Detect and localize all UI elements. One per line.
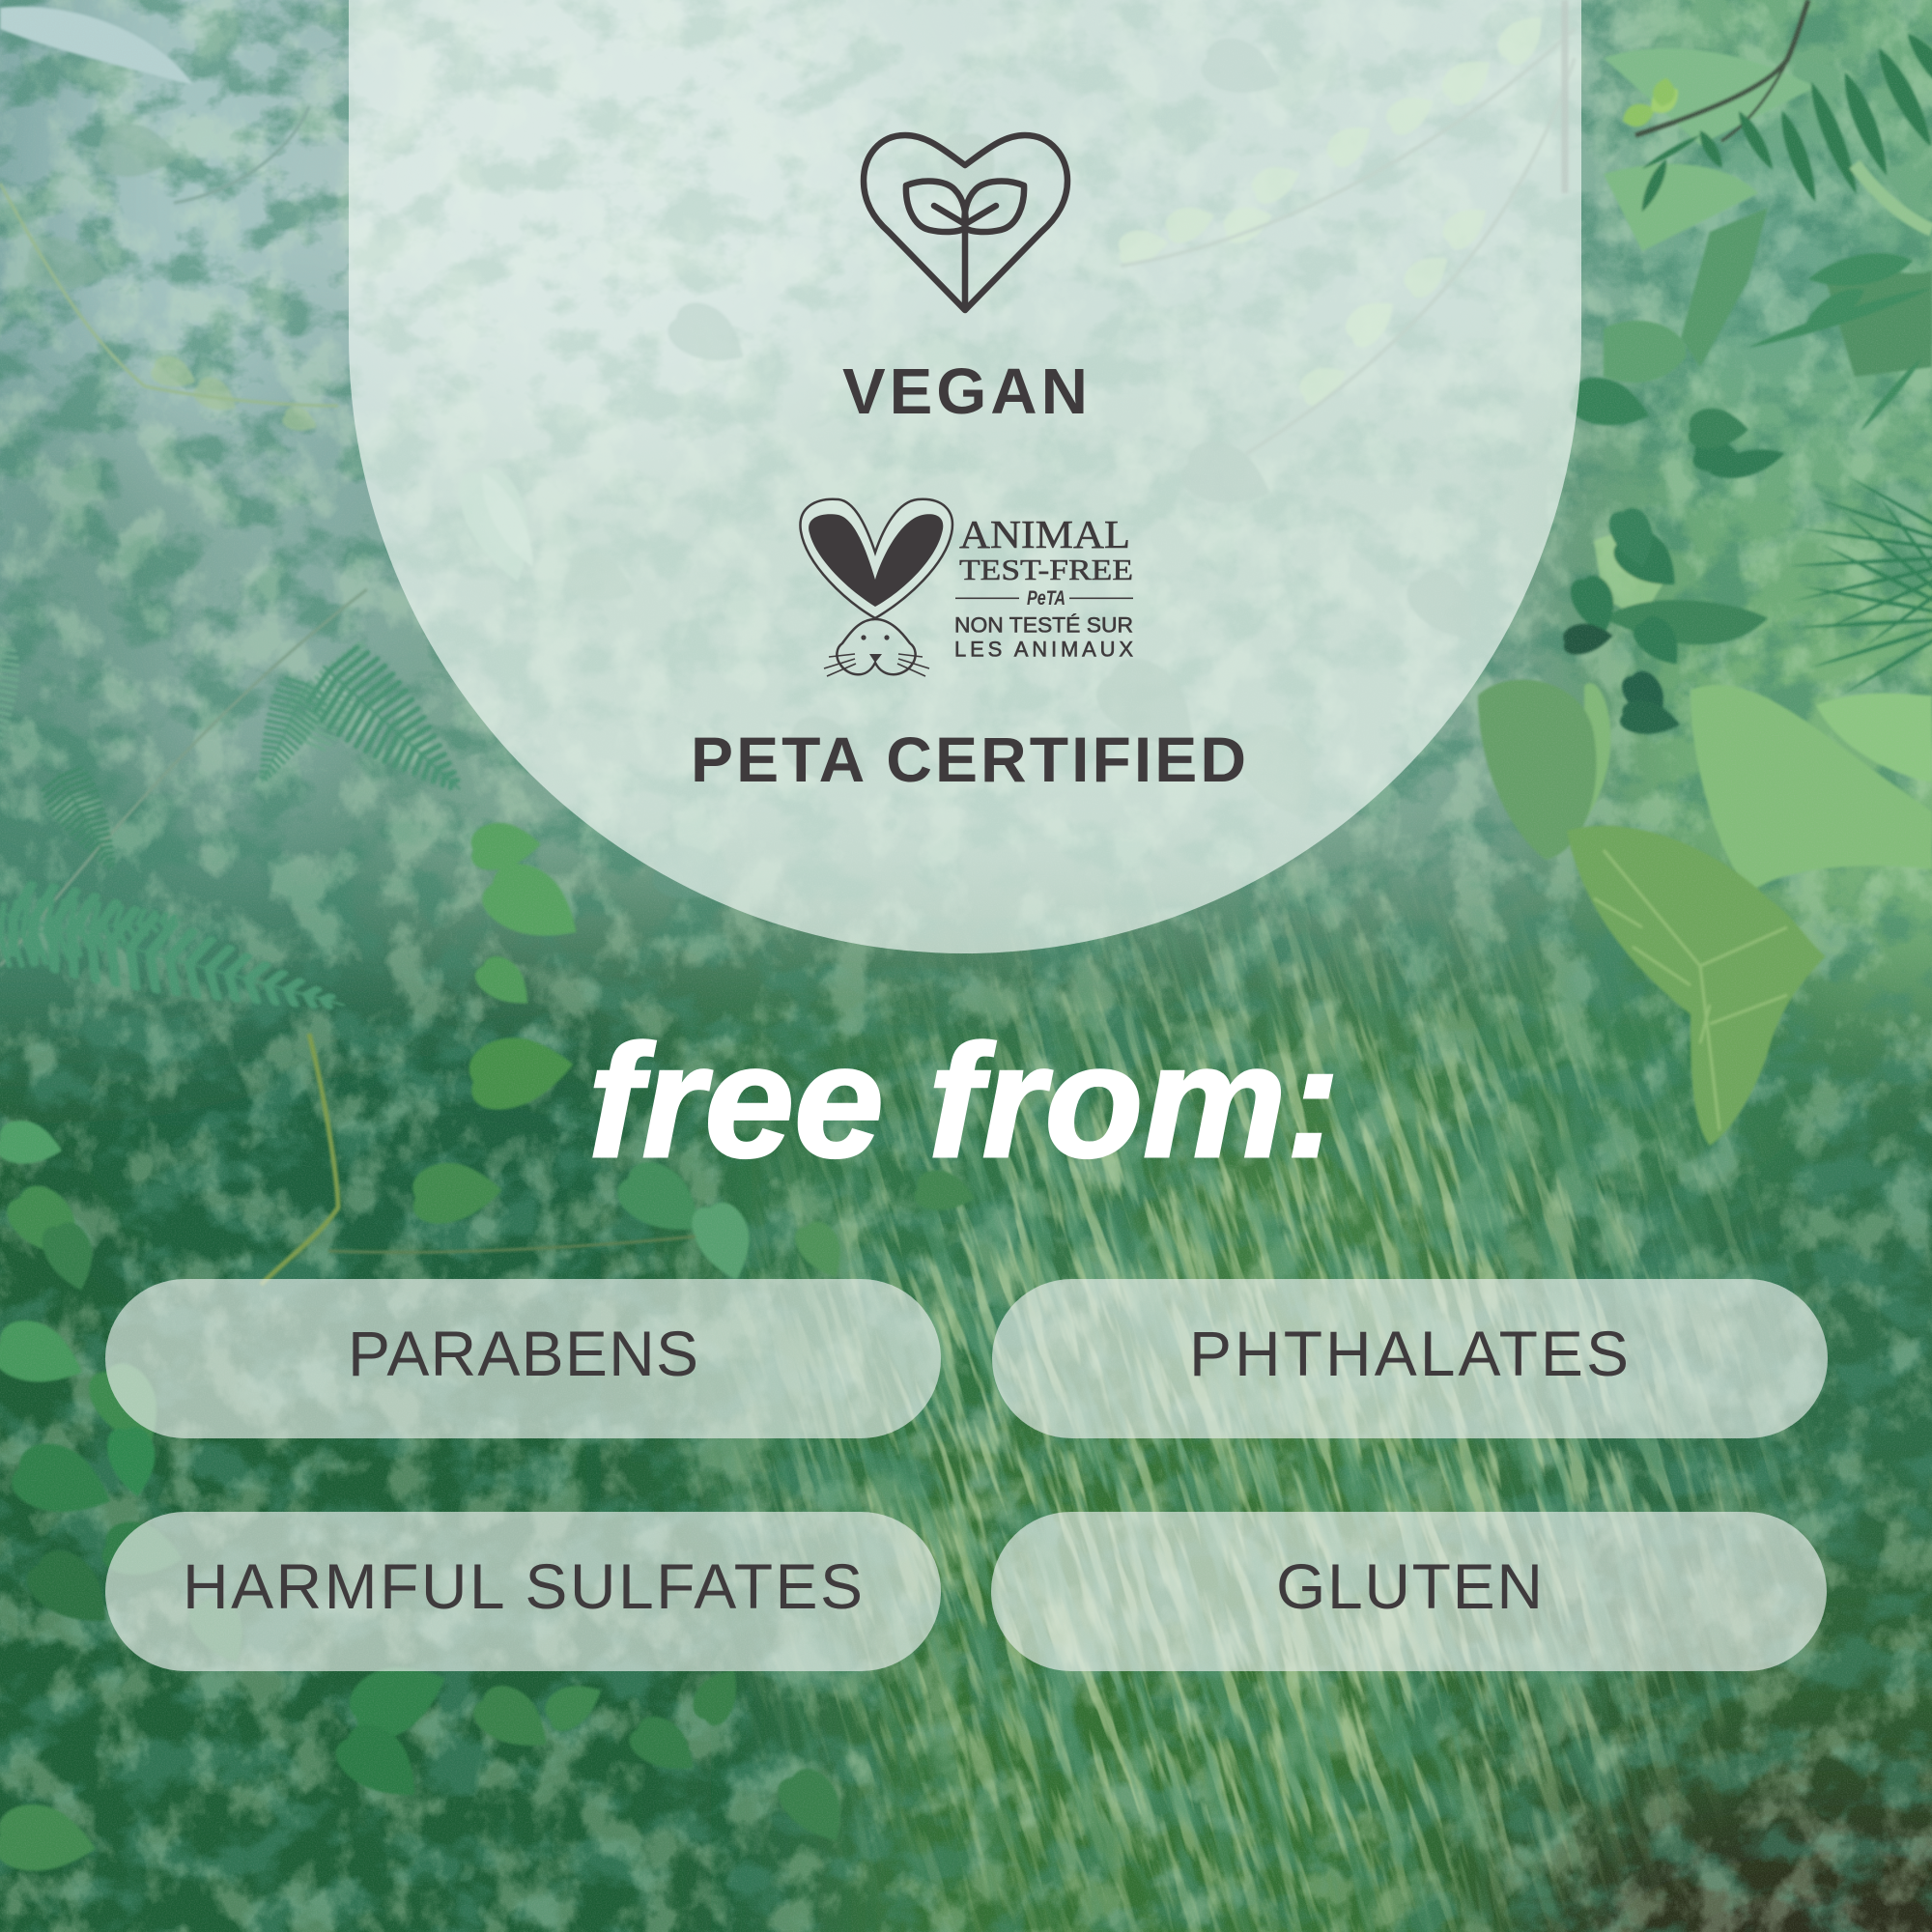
heading: PETA certified: PETA CERTIFIED <box>691 724 1246 795</box>
logo: PETA animal test-free <box>800 499 1133 676</box>
pill: phthalates: PHTHALATES <box>1189 1318 1629 1389</box>
logo text: animal test-free: PeTA <box>1027 587 1065 610</box>
pill: parabens <box>105 1279 941 1438</box>
logo text: animal test-free: LES ANIMAUX <box>954 638 1133 661</box>
foliage upper left <box>0 7 594 1045</box>
logo text: animal test-free: ANIMAL <box>959 512 1130 556</box>
icon: vegan heart with sprout <box>864 135 1067 310</box>
foliage top right <box>1478 0 1932 894</box>
pill: harmful sulfates <box>105 1512 941 1671</box>
pill: phthalates <box>992 1279 1828 1438</box>
foliage big pale leaf <box>1567 826 1826 1146</box>
heading: free from: free from: <box>588 1012 1340 1191</box>
fern right mid <box>1747 246 1932 434</box>
pill: parabens: PARABENS <box>348 1318 698 1389</box>
logo text: animal test-free <box>954 512 1133 661</box>
icon: bunny face <box>824 619 929 676</box>
foliage right pale leaves <box>1594 48 1932 618</box>
foliage lower left leaves <box>0 1028 979 1880</box>
logo text: animal test-free: TEST-FREE <box>959 553 1133 586</box>
fern top right <box>1636 27 1932 214</box>
foliage under the panel <box>451 0 1575 907</box>
icon: bunny ears <box>800 499 952 618</box>
heading: vegan: VEGAN <box>842 355 1088 428</box>
pill: harmful sulfates: HARMFUL SULFATES <box>183 1550 863 1622</box>
pill: gluten <box>991 1512 1827 1671</box>
pill: gluten: GLUTEN <box>1276 1550 1543 1622</box>
logo text: animal test-free: NON TESTÉ SUR <box>954 612 1133 638</box>
panel: rounded frosted arch <box>349 0 1581 953</box>
